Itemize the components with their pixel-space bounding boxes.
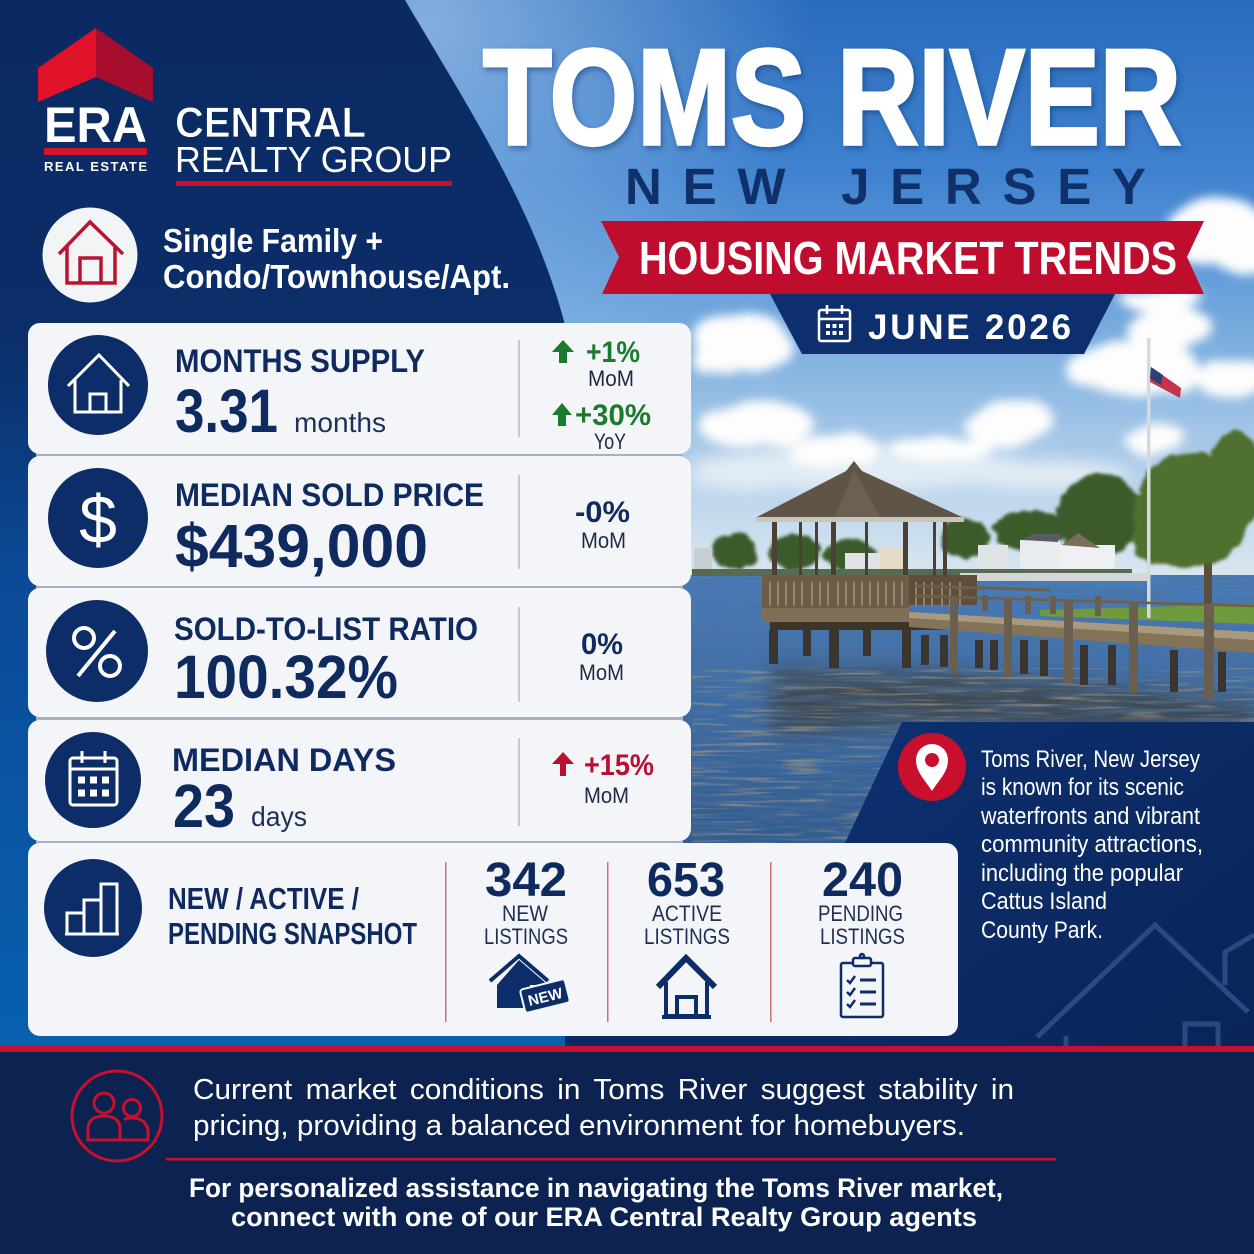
text: market conditions: Current market conditions in Toms River suggest stability in [193,1074,1014,1106]
banner: date [770,294,1115,354]
icon: location pin [898,733,966,801]
sky [400,0,1254,580]
card: median days: 23 [173,772,235,840]
card: median days: MEDIAN DAYS [172,742,396,778]
icon: new home: NEW [526,985,565,1010]
change: month over month: 0% [581,628,623,661]
icon: dollar: $ [79,482,117,558]
change: month over month [579,628,624,685]
heading: snapshot: NEW / ACTIVE / [168,881,359,916]
text: property types [163,222,510,295]
card: sold-to-list ratio [28,588,691,717]
logo: ERA Real Estate: ERA [44,97,147,153]
text: call to action: connect with one of our ERA Central Realty Group agents [231,1202,977,1232]
footer panel [0,1046,1254,1254]
logo: Central Realty Group [175,99,452,186]
gazebo [756,461,977,630]
icon: house [48,335,148,435]
banner: housing market trends [601,221,1204,294]
change: month over month: -0% [575,496,630,529]
icon: bar chart [44,859,142,957]
card: median sold price [28,456,691,586]
text: market conditions [193,1074,1014,1142]
icon: house [658,958,715,1017]
icon: dollar [48,468,148,568]
stat: active listings: 653 [647,854,725,907]
change: month over month [552,336,640,391]
far shore trees [713,473,1142,571]
icon: calendar [45,732,141,828]
change: year over year [552,399,651,454]
change: month over month: MoM [588,366,634,391]
text: location description: community attractions, [981,831,1203,858]
stat: pending listings: 240 [822,854,903,907]
card gaps shading [36,330,683,1030]
pier reflection [770,668,1254,735]
logo: ERA Real Estate: REAL ESTATE [44,159,147,174]
stat: active listings: ACTIVE [652,901,722,926]
card: median sold price: $439,000 [175,512,428,580]
icon: new home [490,956,570,1013]
stat: pending listings [818,854,905,1017]
card: sold-to-list ratio: 100.32% [174,643,398,711]
change: year over year: YoY [594,429,626,454]
change: year over year: +30% [575,399,651,432]
card: median days [28,720,691,841]
card: months supply: 3.31 [175,377,278,445]
change: month over month: MoM [584,783,629,808]
boardwalk [769,586,1254,700]
text: market conditions: pricing, providing a balanced environment for homebuyers. [193,1110,965,1142]
banner: date: JUNE 2026 [868,308,1071,347]
text: location description: County Park. [981,917,1103,944]
text: location description: waterfronts and vibrant [980,803,1200,830]
icon: house in white circle [42,208,138,302]
card: months supply: months [294,407,386,438]
change: month over month: +1% [586,336,640,369]
banner: housing market trends: HOUSING MARKET TRENDS [639,232,1177,284]
grass bank [1040,604,1254,624]
text: location description: is known for its scenic [981,774,1184,801]
stat: active listings [644,854,730,1017]
logo: Central Realty Group: REALTY GROUP [175,139,452,180]
background photo: waterfront scene [405,0,1254,843]
flag pole and flag [1147,338,1181,618]
decorative house outline [1037,925,1254,1048]
change: month over month [552,749,654,808]
card: median days: days [251,801,307,832]
water ripples [692,575,1254,850]
stat: new listings [484,854,570,1013]
text: property types: Condo/Townhouse/Apt. [163,258,510,295]
stat: pending listings: PENDING [818,901,903,926]
heading: snapshot [168,881,417,951]
stat: pending listings: LISTINGS [820,924,905,949]
card: months supply: MONTHS SUPPLY [175,343,425,379]
far shore houses [692,533,1150,581]
left navy panel [0,0,565,1048]
card: median sold price: MEDIAN SOLD PRICE [175,477,484,513]
stat: new listings: NEW [502,901,548,926]
card: months supply [28,323,691,454]
right tree [1132,432,1254,620]
subtitle: NEW JERSEY [625,158,1146,215]
icon: people in red circle [72,1071,162,1161]
logo: ERA Real Estate [38,28,153,174]
navy info panel [845,722,1254,1048]
text: location description: Toms River, New Jersey [981,746,1200,773]
change: month over month: MoM [579,660,624,685]
water [683,575,1254,843]
change: month over month [575,496,630,553]
clouds: puffs [692,200,1254,464]
icon: calendar [819,305,850,341]
text: call to action: For personalized assistance in navigating the Toms River market, [189,1173,1003,1203]
text: location description [980,746,1203,944]
text: location description: including the popular [981,860,1183,887]
icon: percent [46,600,148,702]
text: location description: Cattus Island [981,888,1107,915]
logo: Central Realty Group: CENTRAL [175,99,366,147]
property type [42,208,510,302]
stat: new listings: LISTINGS [484,924,568,949]
text: call to action [189,1173,1003,1232]
icon: clipboard [841,954,883,1017]
change: month over month: MoM [581,528,626,553]
heading: snapshot: PENDING SNAPSHOT [168,916,417,951]
text: property types: Single Family + [163,222,383,259]
card: sold-to-list ratio: SOLD-TO-LIST RATIO [174,611,478,647]
change: month over month: +15% [584,749,654,782]
stat: active listings: LISTINGS [644,924,730,949]
clouds: soft band [690,446,1130,490]
stat: new listings: 342 [485,854,567,907]
card: listings snapshot [28,843,958,1036]
